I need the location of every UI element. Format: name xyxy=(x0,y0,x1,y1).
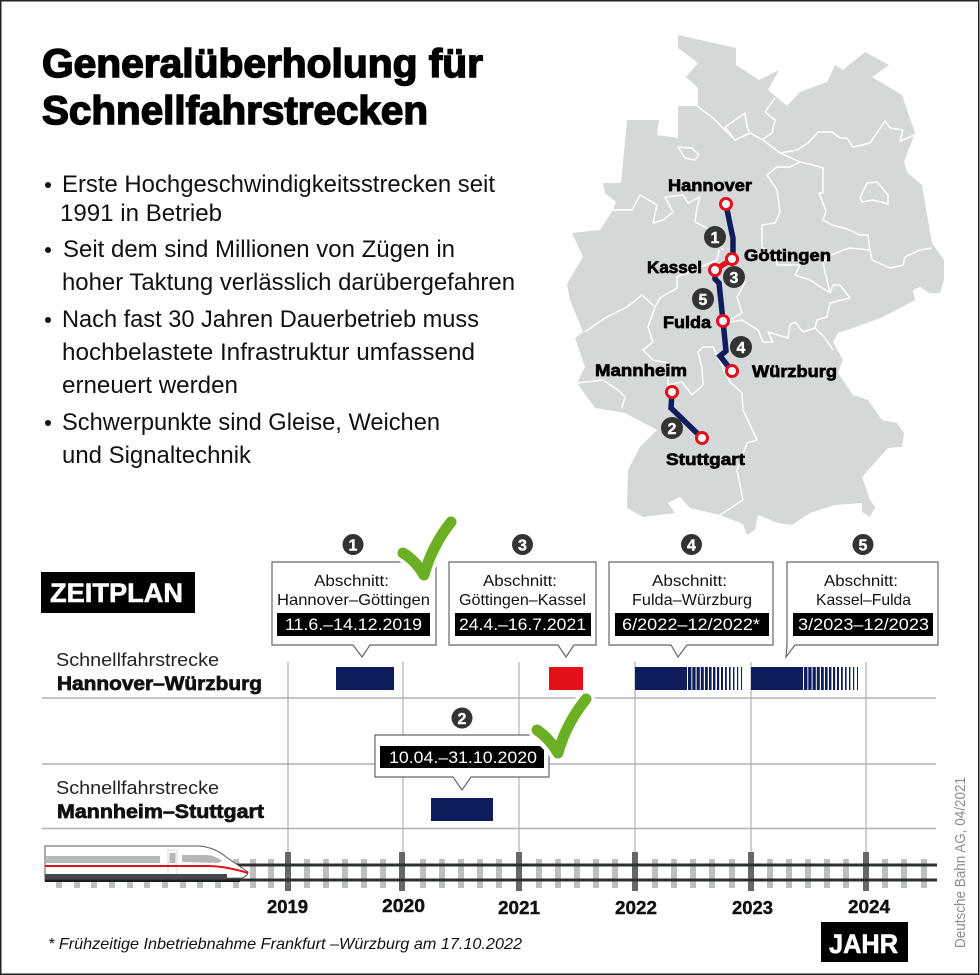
bullet list: Schwerpunkte sind Gleise, Weichen xyxy=(62,409,440,436)
map section numbers: 4 xyxy=(737,340,746,357)
bullet list: erneuert werden xyxy=(62,372,238,399)
axis label: Jahr: JAHR xyxy=(829,929,898,959)
bullet list: hoher Taktung verlässlich darübergefahren xyxy=(62,269,515,296)
city labels: Hannover xyxy=(668,176,752,195)
schedule bar: section 5 xyxy=(751,667,858,690)
row label: Mannheim–Stuttgart: Mannheim–Stuttgart xyxy=(57,802,265,823)
callout: section 3: Abschnitt: xyxy=(483,573,557,590)
callout: section 1: Abschnitt: xyxy=(314,573,389,590)
route: Göttingen to Kassel xyxy=(715,259,732,270)
callout: section 3: 24.4.–16.7.2021 xyxy=(459,615,586,634)
callout: section 4: Fulda–Würzburg xyxy=(632,592,752,609)
city labels: Göttingen xyxy=(744,246,831,265)
source credit: Deutsche Bahn AG, 04/2021 xyxy=(952,777,969,948)
country outline xyxy=(567,35,944,535)
bullet list: 1991 in Betrieb xyxy=(60,200,222,227)
bullet list: und Signaltechnik xyxy=(62,442,252,469)
callout: section 1 xyxy=(272,562,436,657)
map section numbers: 1 xyxy=(711,230,720,247)
axis label: Jahr xyxy=(821,922,908,962)
callout: section 5 xyxy=(786,562,938,657)
map section numbers: 2 xyxy=(668,421,677,438)
bullet list: Nach fast 30 Jahren Dauerbetrieb muss xyxy=(62,306,479,333)
section numbers above callouts xyxy=(342,534,874,728)
callout: section 4: 6/2022–12/2022* xyxy=(622,615,760,634)
state borders xyxy=(577,98,932,515)
map section numbers xyxy=(661,226,752,439)
city labels: Würzburg xyxy=(752,362,837,381)
route: Mannheim to Stuttgart xyxy=(671,392,702,438)
section numbers above callouts: 1 xyxy=(349,538,358,554)
row label: Hannover–Würzburg: Hannover–Würzburg xyxy=(57,674,262,695)
heading: Zeitplan: ZEITPLAN xyxy=(50,578,183,608)
bullet list: Seit dem sind Millionen von Zügen in xyxy=(63,236,455,263)
railway track xyxy=(45,852,937,891)
year labels: 2023 xyxy=(732,898,773,918)
title: Generalüberholung für xyxy=(42,42,483,86)
row label: Mannheim–Stuttgart: Schnellfahrstrecke xyxy=(56,778,219,798)
timeline grid xyxy=(42,662,936,852)
route: Hannover to Göttingen xyxy=(726,204,733,259)
route: Kassel to Würzburg xyxy=(715,270,732,371)
year labels: 2021 xyxy=(498,898,540,918)
callout: section 3 xyxy=(449,562,596,657)
callout: section 2: 10.04.–31.10.2020 xyxy=(389,748,537,767)
title xyxy=(42,42,483,133)
bullet list xyxy=(45,171,515,469)
city labels: Kassel xyxy=(647,258,702,277)
city labels: Stuttgart xyxy=(666,450,745,469)
heading: Zeitplan xyxy=(41,572,195,613)
row label: Mannheim–Stuttgart xyxy=(56,778,265,823)
section numbers above callouts: 5 xyxy=(859,538,868,554)
city labels xyxy=(595,176,837,469)
year labels: 2024 xyxy=(848,897,890,917)
year labels xyxy=(267,896,890,918)
icon: check mark section 2 xyxy=(537,699,586,753)
callout: section 5: Abschnitt: xyxy=(824,573,898,590)
callout: section 3: Göttingen–Kassel xyxy=(459,592,586,609)
callout: section 5: Kassel–Fulda xyxy=(816,592,911,609)
footnote: * Frühzeitige Inbetriebnahme Frankfurt –Würzburg am 17.10.2022 xyxy=(48,936,522,953)
row label: Hannover–Würzburg: Schnellfahrstrecke xyxy=(56,650,219,670)
section numbers above callouts: 4 xyxy=(687,538,696,554)
callout: section 1: 11.6.–14.12.2019 xyxy=(285,615,422,634)
bullet list: hochbelastete Infrastruktur umfassend xyxy=(62,339,475,366)
section numbers above callouts: 2 xyxy=(458,711,467,728)
map section numbers: 5 xyxy=(699,292,708,309)
icon: check mark section 1 xyxy=(403,522,451,575)
icon: high-speed train xyxy=(45,846,248,882)
year labels: 2019 xyxy=(267,897,308,917)
city labels: Fulda xyxy=(663,313,712,332)
station markers xyxy=(666,198,738,444)
callout: section 4 xyxy=(609,562,773,657)
map section numbers: 3 xyxy=(730,270,739,287)
year labels: 2022 xyxy=(615,898,657,918)
callout: section 1: Hannover–Göttingen xyxy=(277,592,430,609)
title: Schnellfahrstrecken xyxy=(42,89,428,133)
schedule bar: section 2 xyxy=(431,798,493,821)
callout: section 4: Abschnitt: xyxy=(652,573,727,590)
callout: section 5: 3/2023–12/2023 xyxy=(798,615,929,634)
schedule bar: section 1 xyxy=(336,667,394,690)
row label: Hannover–Würzburg xyxy=(56,650,262,695)
year labels: 2020 xyxy=(382,896,425,916)
section numbers above callouts: 3 xyxy=(518,538,527,554)
schedule bar: section 4 xyxy=(635,667,742,690)
callout: section 2 xyxy=(375,735,549,790)
schedule bar: section 3 xyxy=(549,667,583,690)
city labels: Mannheim xyxy=(595,361,687,380)
map of Germany xyxy=(567,35,944,535)
bullet list: Erste Hochgeschwindigkeitsstrecken seit xyxy=(62,171,495,198)
